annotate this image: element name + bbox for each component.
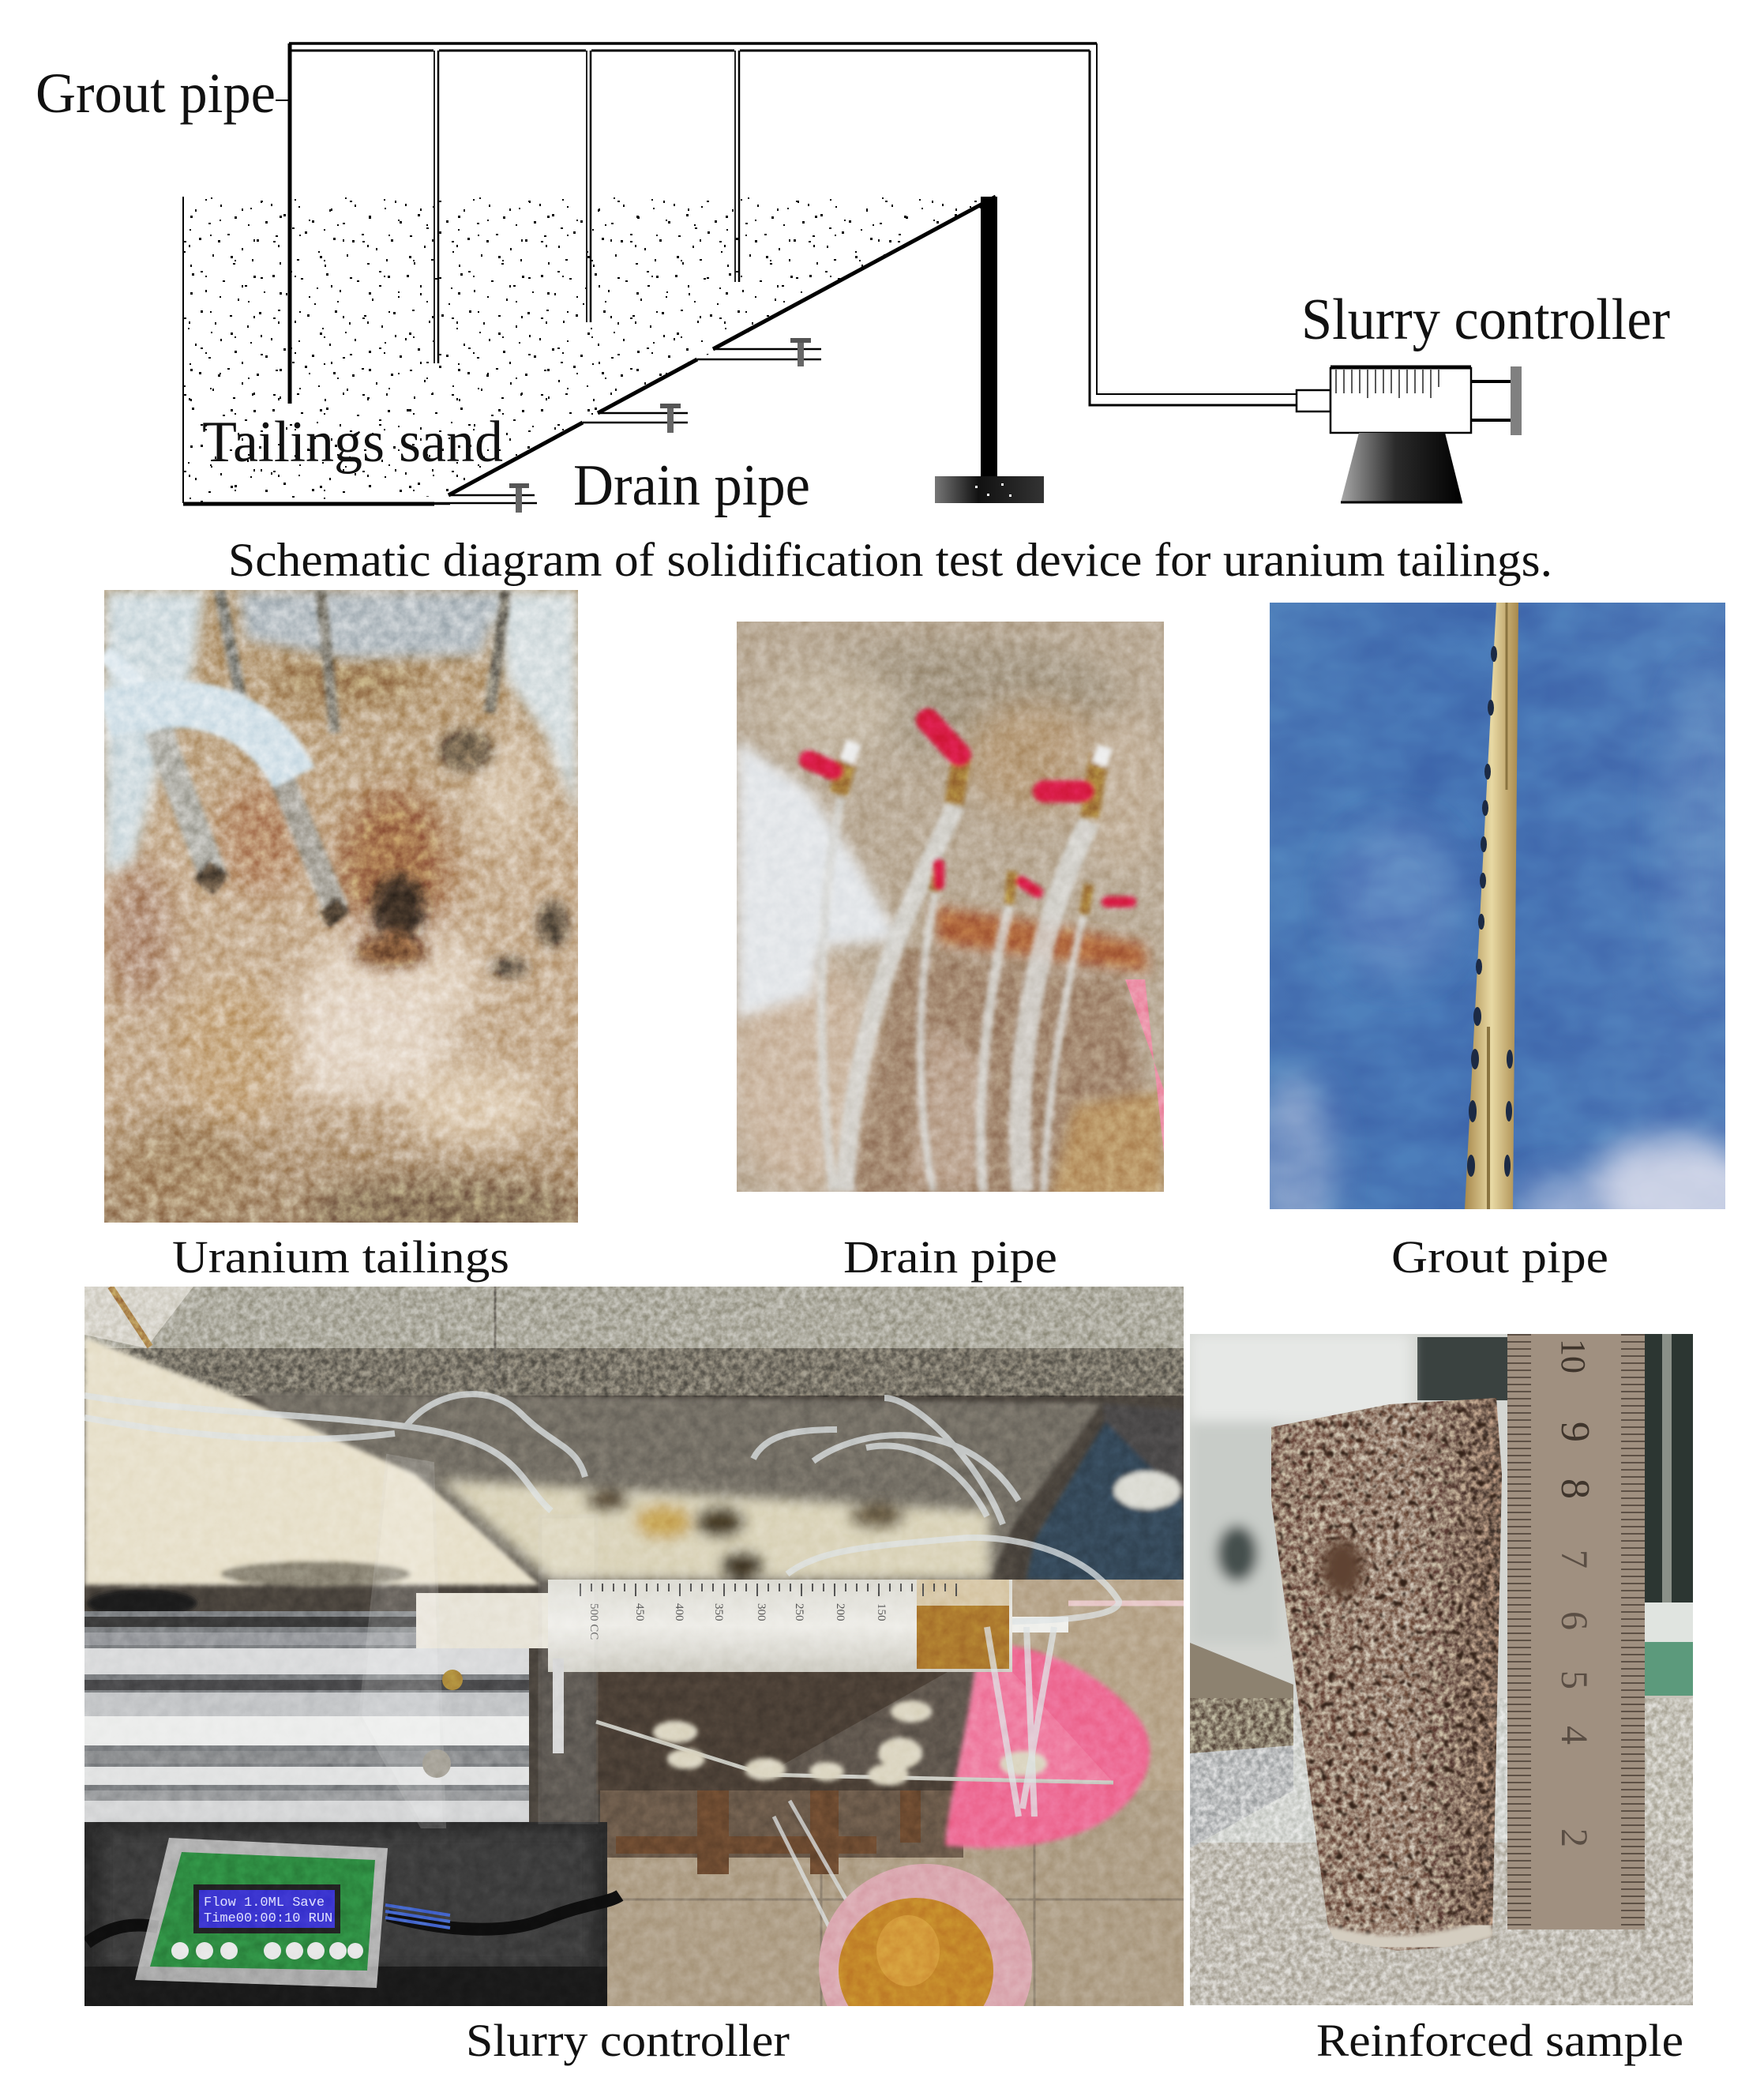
steel ruler with scale: 2 — [1553, 1828, 1595, 1847]
steel ruler with scale: 5 — [1553, 1670, 1595, 1689]
inclined tank side — [449, 197, 996, 495]
acrylic back plate — [247, 1392, 1184, 1587]
leader line to grout pipe — [276, 100, 290, 101]
panel: schematic diagram of test device — [36, 43, 1670, 518]
syringe barrel with scale: 150 — [875, 1603, 888, 1621]
steel ruler with scale — [1507, 1334, 1645, 1929]
heading: schematic caption: Schematic diagram of solidification test device for uranium tailings. — [228, 534, 1552, 586]
pink bowl with slurry — [819, 1864, 1032, 2069]
tank wall and bottom — [183, 197, 450, 504]
drain pipes and valves — [434, 339, 821, 513]
tailings sand fill — [183, 197, 996, 502]
caption: Slurry controller: Slurry controller — [466, 2015, 790, 2066]
photo: reinforced sample — [1190, 1334, 1693, 2005]
syringe barrel with scale: 350 — [712, 1603, 725, 1621]
reinforced cylinder — [1263, 1390, 1508, 1959]
cloth — [84, 1337, 540, 1617]
grout pipes from the slurry controller — [289, 43, 1297, 405]
wooden chair — [616, 1790, 921, 1874]
tray — [1190, 1643, 1293, 1848]
steel ruler with scale: 7 — [1553, 1550, 1595, 1569]
label: Tailings sand: Tailings sand — [202, 410, 503, 475]
tailings in tank — [438, 1479, 990, 1580]
syringe barrel with scale: 450 — [633, 1603, 646, 1621]
steel ruler with scale: 4 — [1553, 1726, 1595, 1745]
black table — [84, 1822, 607, 2006]
steel ruler with scale: 8 — [1552, 1478, 1597, 1499]
syringe barrel with scale: 200 — [834, 1603, 846, 1621]
steel ruler with scale: 9 — [1552, 1422, 1597, 1442]
label: Drain pipe: Drain pipe — [573, 453, 810, 518]
support post and base — [935, 197, 1044, 503]
syringe barrel with scale: 250 — [793, 1603, 805, 1621]
controller box with LCD: Flow 1.0ML Save — [204, 1896, 325, 1911]
icon: syringe slurry controller — [1297, 366, 1522, 502]
controller box with LCD — [87, 1838, 620, 1988]
aluminium rails — [84, 1611, 529, 1822]
syringe barrel with scale — [416, 1580, 1184, 1672]
syringe barrel with scale: 500 CC — [587, 1603, 600, 1640]
concrete ledge — [84, 1287, 1184, 1396]
steel ruler with scale: 10 — [1554, 1339, 1593, 1373]
pink bucket — [945, 1643, 1150, 1848]
transparent tubes — [84, 1394, 1119, 1998]
lower centre background and floor — [596, 1580, 1184, 2006]
caption: Uranium tailings: Uranium tailings — [172, 1231, 509, 1283]
caption: Grout pipe: Grout pipe — [1391, 1231, 1608, 1283]
syringe barrel with scale: 300 — [755, 1603, 768, 1621]
acrylic lower plate with glue spots — [596, 1672, 1113, 1786]
controller box with LCD: Time00:00:10 RUN — [204, 1911, 332, 1926]
steel ruler with scale: 6 — [1553, 1611, 1595, 1630]
photo: slurry controller — [84, 1287, 1184, 2069]
photo: grout pipe — [1270, 603, 1725, 1209]
syringe barrel with scale: 400 — [673, 1603, 685, 1621]
caption: Drain pipe: Drain pipe — [843, 1231, 1057, 1283]
caption: Reinforced sample: Reinforced sample — [1316, 2015, 1683, 2066]
acrylic frames and bolts — [360, 1456, 596, 1827]
photo: uranium tailings — [104, 590, 578, 1244]
label: Grout pipe: Grout pipe — [36, 62, 276, 125]
perforated grout pipe — [1465, 603, 1518, 1209]
label: Slurry controller: Slurry controller — [1301, 287, 1670, 352]
icon group: valves with red handles — [809, 720, 1131, 914]
photo: drain pipe — [726, 622, 1169, 1200]
